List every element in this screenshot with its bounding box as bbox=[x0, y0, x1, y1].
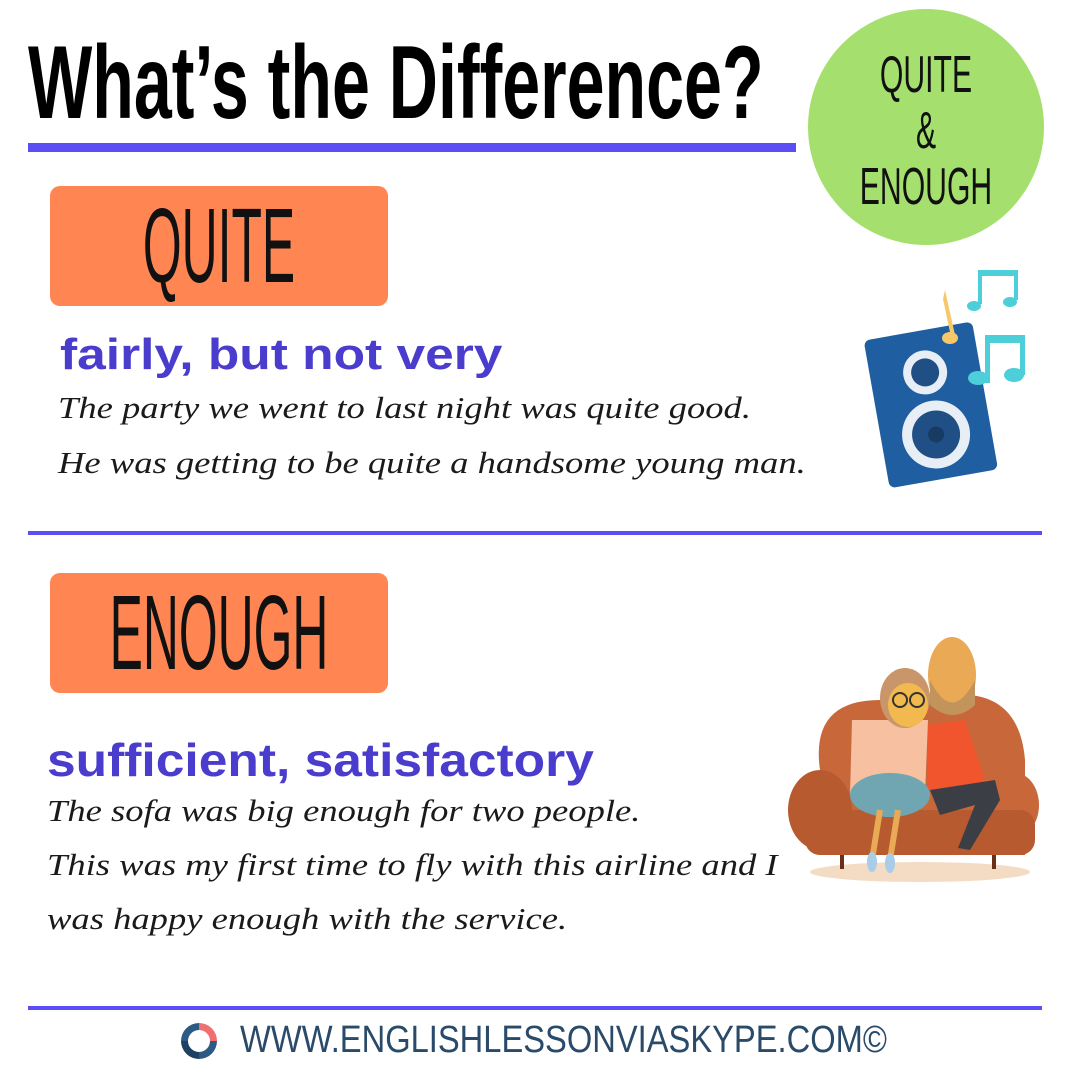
definition: enough: sufficient, satisfactory bbox=[47, 734, 594, 786]
heading box: ENOUGH bbox=[50, 573, 388, 693]
examples: enough: was happy enough with the service. bbox=[47, 901, 567, 936]
badge: quite & enough: & bbox=[916, 102, 936, 160]
badge: quite & enough bbox=[808, 9, 1044, 245]
illustration: couple on sofa bbox=[788, 637, 1039, 882]
heading box: QUITE bbox=[50, 186, 388, 306]
icon: logo bbox=[181, 1023, 217, 1059]
title: What’s the Difference? bbox=[28, 25, 764, 141]
badge: quite & enough: ENOUGH bbox=[860, 158, 992, 216]
icon: speaker with music notes bbox=[864, 270, 1025, 488]
heading box: QUITE: QUITE bbox=[143, 187, 295, 305]
heading box: ENOUGH: ENOUGH bbox=[110, 574, 328, 692]
examples: quite: He was getting to be quite a handsome young man. bbox=[58, 445, 806, 480]
examples: enough: This was my first time to fly with this airline and I bbox=[47, 847, 778, 882]
divider bbox=[28, 531, 1042, 535]
examples: enough bbox=[47, 793, 779, 936]
footer: logo and website: WWW.ENGLISHLESSONVIASKYPE.COM© bbox=[240, 1019, 887, 1061]
title underline bbox=[28, 143, 796, 152]
examples: quite: The party we went to last night was quite good. bbox=[58, 390, 751, 425]
examples: quite bbox=[58, 390, 806, 480]
badge: quite & enough: QUITE bbox=[880, 46, 972, 104]
definition: quite: fairly, but not very bbox=[60, 330, 502, 379]
examples: enough: The sofa was big enough for two people. bbox=[47, 793, 640, 828]
footer divider bbox=[28, 1006, 1042, 1010]
